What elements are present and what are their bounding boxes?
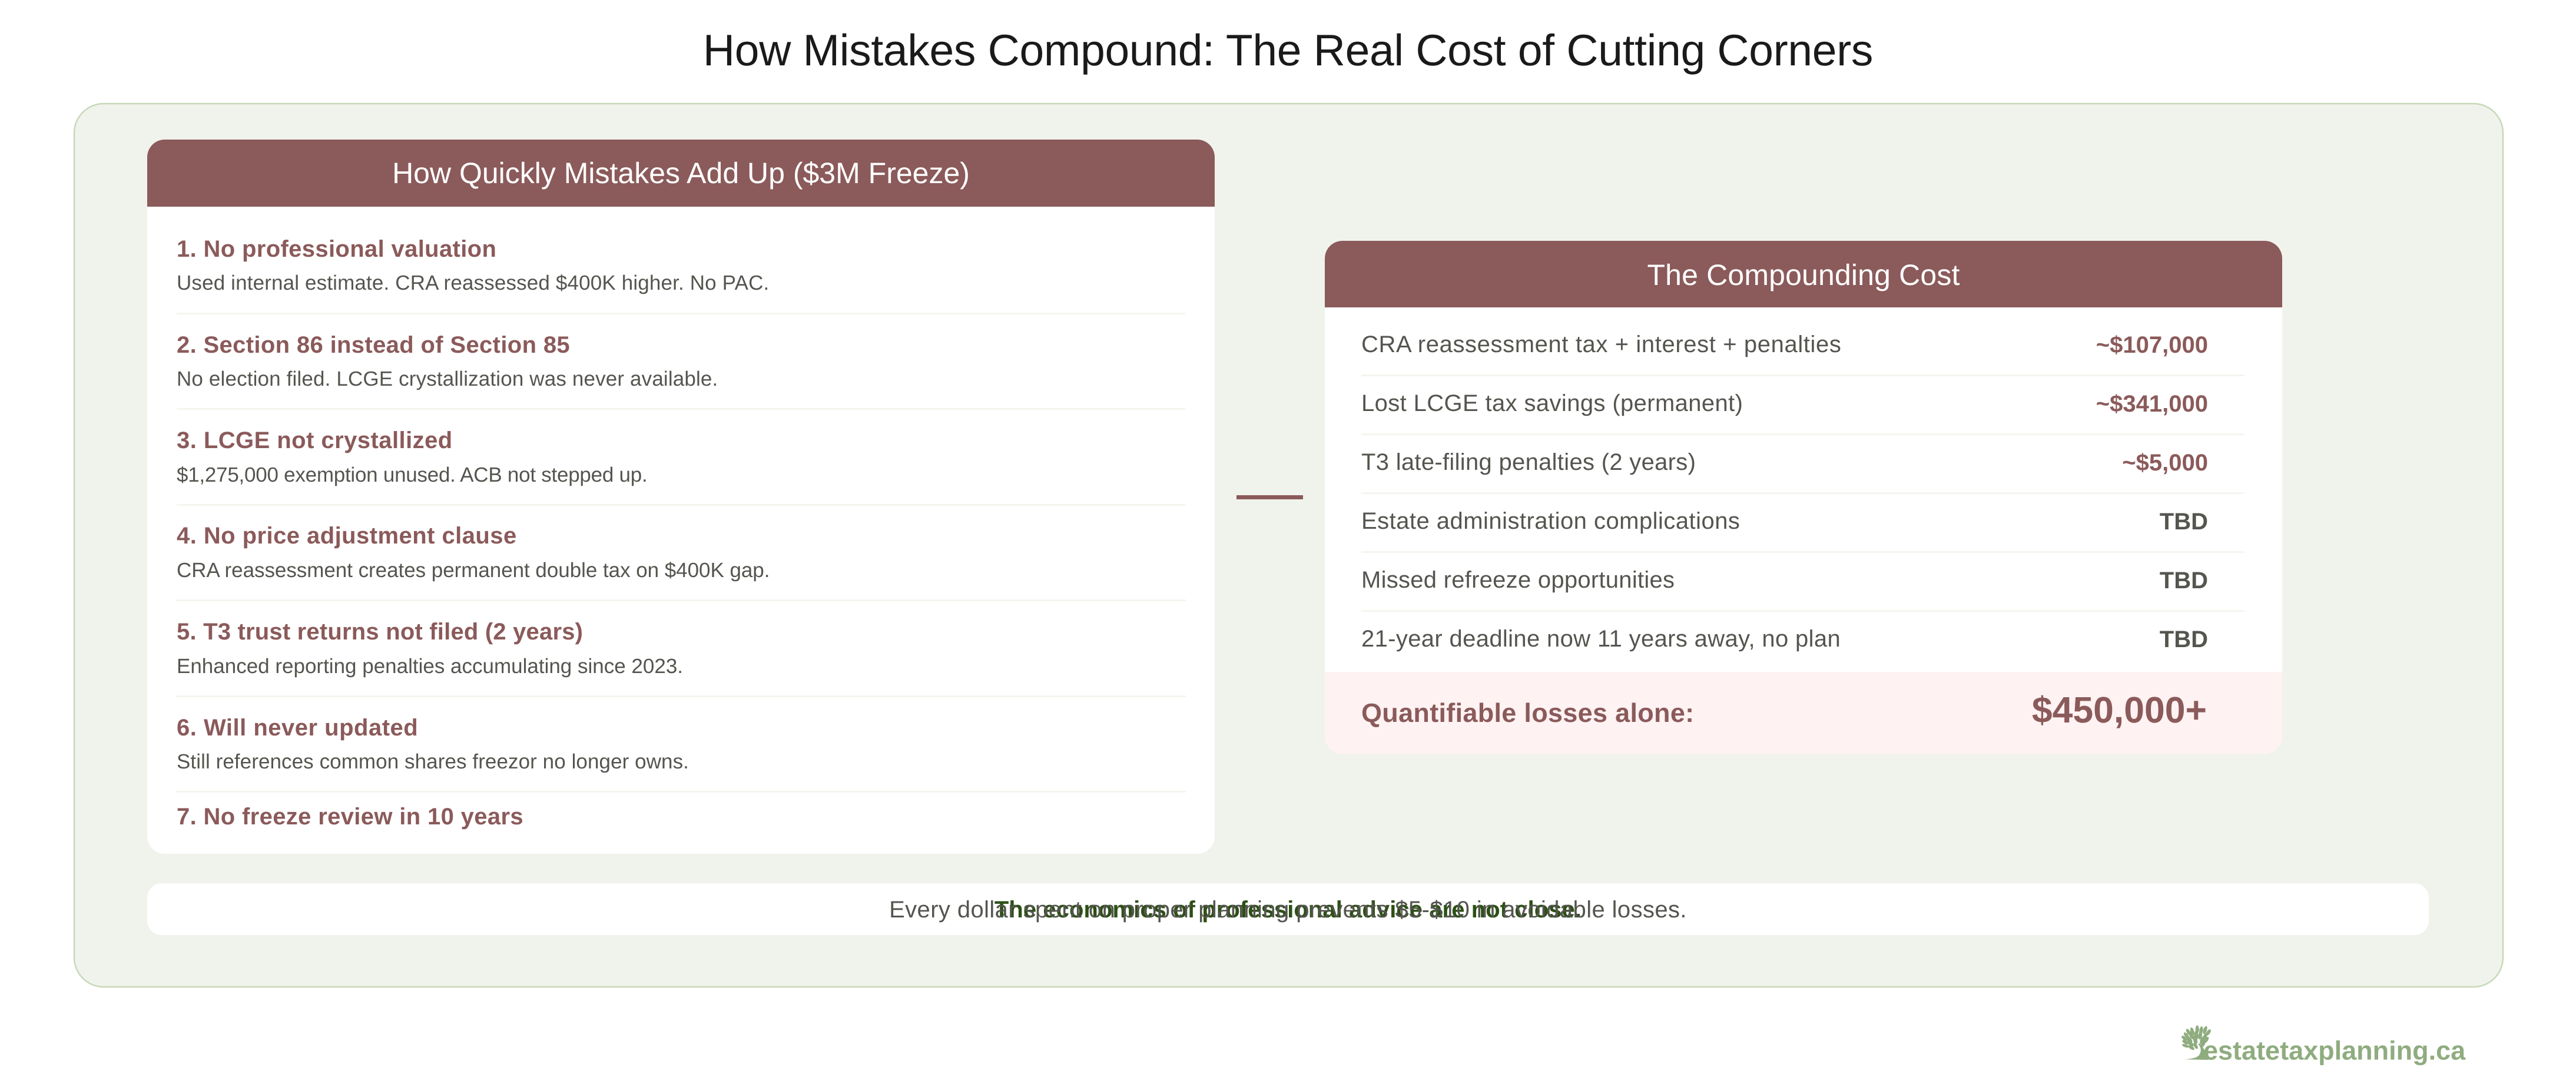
mistake 4 <box>177 523 770 582</box>
cost row 6 <box>1361 626 2208 652</box>
total row: Quantifiable losses alone: <box>1361 698 1694 728</box>
total row <box>1325 672 2282 754</box>
mistake 1 <box>177 236 769 294</box>
cost row 5 <box>1361 567 2208 594</box>
mistake 5 <box>177 619 683 678</box>
mistake 5: Enhanced reporting penalties accumulating since 2023. <box>177 655 683 678</box>
cost row 2 <box>1361 390 2208 417</box>
note bar: The economics of professional advice are not close. <box>994 897 1582 923</box>
mistake 7: 7. No freeze review in 10 years <box>177 804 523 830</box>
connector line <box>1236 495 1303 499</box>
panel header: compounding cost: The Compounding Cost <box>1647 259 1960 291</box>
mistake 5: 5. T3 trust returns not filed (2 years) <box>177 619 583 645</box>
total row: $450,000+ <box>2032 690 2207 731</box>
mistake 2 <box>177 332 718 390</box>
mistake 1: Used internal estimate. CRA reassessed $400K higher. No PAC. <box>177 271 769 294</box>
cost row 1: ~$107,000 <box>2096 332 2208 358</box>
mistake 2: 2. Section 86 instead of Section 85 <box>177 332 570 358</box>
panel: main background <box>74 104 2503 987</box>
cost row 3 <box>1361 449 2208 476</box>
cost row 4 <box>1361 508 2208 535</box>
mistake 3: $1,275,000 exemption unused. ACB not stepped up. <box>177 463 647 486</box>
mistake 1: 1. No professional valuation <box>177 236 496 262</box>
mistake 6 <box>177 715 689 773</box>
panel header: mistakes <box>147 140 1215 207</box>
mistake 3 <box>177 427 647 486</box>
note bar <box>147 883 2429 935</box>
panel header: mistakes: How Quickly Mistakes Add Up ($3M Freeze) <box>392 157 970 190</box>
panel header: compounding cost <box>1325 241 2282 307</box>
note bar: Every dollar spent on proper planning prevents $5-$10 in avoidable losses. <box>889 897 1687 923</box>
mistake 4: CRA reassessment creates permanent double tax on $400K gap. <box>177 559 770 582</box>
cost row 5: TBD <box>2160 568 2208 594</box>
cost row 4: Estate administration complications <box>1361 508 1740 534</box>
mistake 2: No election filed. LCGE crystallization was never available. <box>177 367 718 390</box>
icon: tree <box>2181 1025 2212 1060</box>
mistake 6: 6. Will never updated <box>177 715 418 741</box>
logo wordmark: estatetaxplanning.ca <box>2203 1035 2466 1066</box>
cost row 6: 21-year deadline now 11 years away, no plan <box>1361 626 1841 652</box>
cost row 3: ~$5,000 <box>2122 450 2208 476</box>
logo <box>2181 1025 2466 1066</box>
mistake 6: Still references common shares freezor no longer owns. <box>177 750 689 773</box>
cost row 3: T3 late-filing penalties (2 years) <box>1361 449 1696 475</box>
cost row 2: ~$341,000 <box>2096 391 2208 417</box>
cost row 4: TBD <box>2160 509 2208 535</box>
cost row 5: Missed refreeze opportunities <box>1361 567 1675 593</box>
panel: how quickly mistakes add up <box>147 140 1215 854</box>
cost row 1 <box>1361 332 2208 358</box>
mistake 4: 4. No price adjustment clause <box>177 523 517 549</box>
title: How Mistakes Compound: The Real Cost of Cutting Corners <box>703 25 1873 75</box>
cost row 1: CRA reassessment tax + interest + penalties <box>1361 332 1842 357</box>
cost row 6: TBD <box>2160 627 2208 652</box>
mistake 3: 3. LCGE not crystallized <box>177 427 453 453</box>
cost row 2: Lost LCGE tax savings (permanent) <box>1361 390 1743 416</box>
panel: the compounding cost <box>1325 241 2282 754</box>
